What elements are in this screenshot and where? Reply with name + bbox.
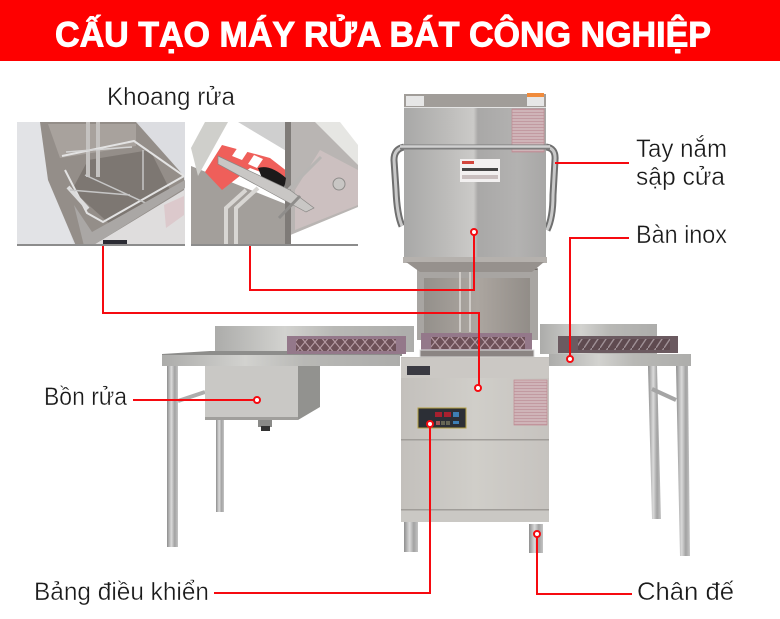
handle front bar [400, 144, 550, 150]
leader: wash chamber photo 1 [103, 246, 481, 391]
title banner [0, 0, 780, 61]
lid handle sides [394, 147, 555, 230]
right table [540, 324, 691, 556]
hood body [404, 108, 546, 258]
left table with sink [162, 326, 414, 547]
right table top [549, 354, 691, 366]
sink basin [205, 366, 320, 431]
leader: wash chamber photo 2 [250, 229, 477, 290]
photo: wash chamber with rack [17, 122, 185, 246]
brand plate [407, 366, 430, 375]
hood top strip [404, 93, 546, 108]
right front leg [676, 366, 690, 556]
leader: sink [133, 397, 260, 403]
table front leg [167, 366, 178, 547]
right foot [529, 524, 543, 553]
lower body [401, 357, 549, 522]
left foot [404, 522, 418, 552]
title: CẤU TẠO MÁY RỬA BÁT CÔNG NGHIỆP [55, 14, 711, 54]
label: Tay nắm sập cửa: Tay nắm [636, 134, 727, 163]
control panel [418, 408, 466, 428]
leader: handle [555, 162, 629, 164]
right brace [652, 389, 676, 400]
label: Chân đế: Chân đế [637, 578, 734, 606]
dish rack center [421, 333, 532, 350]
right back leg [648, 366, 661, 519]
warning sticker [512, 109, 544, 152]
dish rack left [287, 336, 406, 354]
label: Tay nắm sập cửa: sập cửa [636, 163, 725, 191]
label: Tay nắm sập cửa [636, 134, 727, 191]
leader: control panel [214, 421, 433, 593]
dish rack right [558, 336, 678, 353]
leader: base foot [534, 531, 632, 594]
upper chamber back [417, 264, 538, 340]
leg brace [178, 392, 205, 401]
body warning sticker [514, 380, 547, 425]
right backsplash [540, 324, 657, 354]
leader: table [567, 238, 629, 362]
table back leg [216, 420, 224, 512]
label: Bảng điều khiển: Bảng điều khiển [34, 578, 209, 606]
front sticker [460, 159, 500, 182]
label: Bồn rửa: Bồn rửa [44, 383, 127, 411]
heading: Khoang rửa: Khoang rửa [107, 83, 235, 111]
dishwasher [394, 93, 555, 553]
photo: spray arm inside lid [191, 122, 358, 246]
label: Bàn inox: Bàn inox [636, 221, 727, 249]
table top [162, 351, 402, 366]
table backsplash [215, 326, 414, 352]
